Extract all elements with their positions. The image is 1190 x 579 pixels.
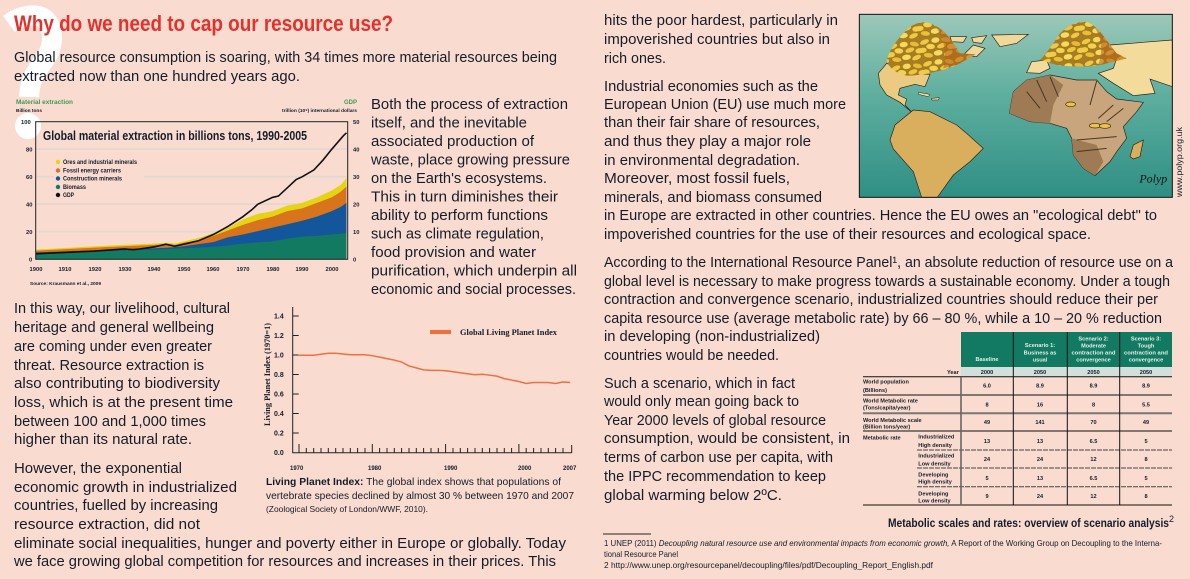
coin pile over north america: [887, 22, 975, 76]
table values: 8: [1144, 494, 1148, 500]
intro text: [14, 49, 557, 85]
text block: extraction pressures: waste, place growing pressure: [370, 152, 570, 168]
table values: 8.9: [1142, 384, 1150, 390]
africa shaded side: [1009, 75, 1103, 176]
stacked area layers: [36, 133, 346, 259]
table caption: 2: [1169, 514, 1174, 524]
text block: ecological debt: Industrial economies such as the: [604, 78, 818, 95]
left and right axis labels: 100: [21, 120, 31, 126]
table values: 70: [1090, 420, 1097, 426]
row labels: [863, 380, 955, 505]
chart title: Global material extraction in billions tons, 1990-2005: [43, 128, 307, 143]
row labels: Developing: [918, 492, 949, 498]
map frame: [859, 14, 1172, 197]
year row: 2000: [981, 370, 993, 376]
chart legend: [56, 160, 138, 199]
footnotes: 2 http://www.unep.org/resourcepanel/decoupling/files/pdf/Decoupling_Report_English.pdf: [604, 561, 934, 570]
row labels: World Metabolic rate: [863, 399, 918, 405]
year axis labels: 1990: [296, 267, 308, 273]
x axis labels: 1980: [368, 466, 382, 472]
text block: ecological debt: minerals, and biomass consumed: [604, 189, 822, 206]
footnotes: [603, 534, 1162, 570]
remaining coins in africa: [1066, 102, 1111, 128]
text block: international resource panel: According to the International Resource Panel¹, an absolute reduction of resource use on a: [604, 254, 1174, 271]
left and right axis labels: 50: [353, 120, 359, 126]
footnotes: tional Resource Panel: [604, 550, 678, 559]
greenland and arctic: [950, 34, 1028, 57]
table values: 8.9: [1090, 384, 1097, 390]
header labels: Scenario 2:: [1078, 336, 1109, 342]
table values: 141: [1035, 420, 1045, 426]
africa mine lines: [1027, 77, 1123, 152]
x axis labels: 2000: [518, 466, 532, 472]
text block: such a scenario: would only mean going back to: [603, 393, 799, 410]
year axis labels: 1900: [30, 267, 42, 273]
y axis labels: 0.4: [274, 411, 284, 418]
south america: [890, 110, 983, 197]
text block: ecological debt: in Europe are extracted in other countries. Hence the EU owes an "ecological debt" to: [604, 207, 1157, 224]
row labels: Developing: [918, 473, 949, 479]
row labels: (Billions): [863, 388, 887, 394]
y axis labels: 1.4: [274, 314, 284, 320]
year axis labels: 1950: [178, 267, 190, 273]
text block: ecological debt: European Union (EU) use much more: [604, 96, 846, 113]
y axis title: Living Planet Index (1970=1): [263, 323, 272, 426]
text block: such a scenario: [603, 375, 850, 504]
chart axis headings: trillion (10⁹) international dollars: [282, 108, 357, 113]
x axis labels: [290, 466, 577, 472]
chart caption: Living Planet Index: The global index shows that populations of: [266, 476, 561, 488]
left and right axis labels: [21, 120, 359, 264]
header labels: usual: [1033, 357, 1048, 363]
chart legend: Biomass: [63, 185, 87, 191]
chart axis headings: [16, 100, 357, 113]
table values: 6.5: [1090, 476, 1097, 482]
table values: 6.0: [983, 384, 991, 390]
row labels: World population: [863, 380, 909, 386]
x axis labels: 1990: [444, 466, 458, 472]
table values: 8: [1092, 402, 1095, 408]
footnotes: 1 UNEP (2011) Decoupling natural resource use and environmental impacts from economic growth, A Report of the Working Group on Decoupling to the Interna-: [604, 539, 1162, 548]
chart legend: GDP: [63, 193, 74, 199]
header labels: contraction and: [1072, 351, 1116, 357]
left and right axis labels: 10: [353, 230, 359, 236]
header labels: Moderate: [1081, 344, 1106, 350]
text block: extraction pressures: such as climate regulation,: [371, 226, 544, 242]
row labels: Industrialized: [918, 435, 955, 441]
row labels: (Billion tons/year): [863, 425, 910, 431]
left and right axis labels: 0: [353, 258, 356, 264]
y axis labels: 1.2: [274, 333, 284, 340]
table values: 12: [1090, 457, 1097, 463]
table values: 24: [984, 457, 991, 463]
left and right axis labels: 40: [26, 202, 32, 208]
intro text: Global resource consumption is soaring, with 34 times more material resources being: [14, 49, 557, 66]
legend backing: [54, 155, 144, 201]
year axis labels: [30, 267, 338, 273]
text block: ecological debt: [604, 78, 1157, 243]
row labels: Industrialized: [918, 454, 955, 460]
text block: extraction pressures: on the Earth's ecosystems.: [371, 170, 547, 187]
row labels: Low density: [918, 461, 952, 467]
row labels: High density: [918, 480, 953, 486]
table values: 13: [984, 439, 990, 445]
text block: international resource panel: in developing (non-industrialized): [604, 328, 820, 345]
text block: exponential growth: countries, fuelled by increasing: [14, 497, 218, 514]
text block: ecological debt: than their fair share of resources,: [604, 114, 820, 131]
header labels: contraction and: [1124, 351, 1169, 357]
text block: exponential growth: economic growth in industrialized: [14, 479, 237, 496]
row labels: Low density: [918, 499, 952, 505]
text block: exponential growth: resource extraction, did not: [14, 516, 201, 533]
text block: livelihood under threat: between 100 and 1,000 times: [14, 413, 206, 430]
header labels: Tough: [1138, 344, 1155, 350]
text block: international resource panel: countries would be needed.: [604, 347, 779, 364]
y axis labels: 0.0: [274, 450, 284, 457]
text block: extraction pressures: [370, 96, 577, 298]
chart caption: (Zoological Society of London/WWF, 2010).: [266, 504, 428, 514]
text block: international resource panel: [604, 254, 1174, 364]
chart axis headings: Billion tons: [16, 108, 42, 113]
text block: extraction pressures: food provision and water: [371, 244, 536, 261]
table values: 8: [985, 402, 989, 408]
year row: Year: [947, 370, 960, 376]
text block: international resource panel: contraction and convergence scenario, industrialized countries should reduce their per: [604, 291, 1158, 308]
text block: exponential growth: we face growing global competition for resources and increases in their prices. This: [13, 553, 556, 570]
text block: livelihood under threat: heritage and general wellbeing: [14, 319, 214, 336]
caribbean islands: [918, 92, 939, 100]
text block: extraction pressures: economic and social processes.: [371, 281, 576, 298]
row labels: (Tons/capita/year): [863, 406, 911, 412]
row labels: High density: [918, 443, 953, 449]
title: Why do we need to cap our resource use?: [14, 11, 393, 36]
text block: extraction pressures: itself, and the inevitable: [371, 114, 527, 132]
text block: livelihood under threat: loss, which is at the present time: [14, 394, 233, 411]
year row: 2050: [1087, 370, 1100, 376]
table values: 5: [1144, 476, 1148, 482]
left and right axis labels: 20: [353, 202, 359, 208]
text block: international resource panel: capita resource use (average metabolic rate) by 66 – 80 %, while a 10 – 20 % reduction: [604, 310, 1162, 327]
text block: extraction pressures: purification, which underpin all: [371, 262, 577, 280]
x axis labels: 2007: [563, 466, 577, 472]
year axis labels: 1960: [207, 267, 219, 273]
table header band: [961, 332, 1172, 367]
table values: 13: [1037, 476, 1043, 482]
table values: 12: [1090, 494, 1097, 500]
chart legend: Construction minerals: [63, 176, 123, 182]
text block: poor hardest: impoverished countries but also in: [604, 31, 830, 48]
table values: 8.9: [1036, 384, 1044, 390]
text block: livelihood under threat: are coming under even greater: [14, 338, 212, 355]
text block: international resource panel: global level is necessary to make progress towards a sustainable economy. Under a tough: [604, 273, 1170, 290]
y axis labels: 1.0: [274, 352, 284, 360]
table values: 6.5: [1090, 439, 1097, 445]
left and right axis labels: 60: [26, 175, 32, 181]
table values: 24: [1037, 494, 1044, 500]
x axis labels: 1970: [290, 466, 304, 472]
text block: ecological debt: Moreover, most fossil fuels,: [604, 170, 790, 187]
legend: Global Living Planet Index: [460, 328, 557, 337]
text block: ecological debt: and thus they play a major role: [604, 133, 811, 150]
y axis labels: 0.6: [274, 392, 284, 398]
table values: 49: [1143, 420, 1149, 426]
row labels: Metabolic rate: [863, 435, 901, 441]
y axis labels: 0.2: [274, 430, 284, 438]
row labels: World Metabolic scale: [863, 418, 922, 424]
grid lines: [36, 149, 347, 232]
year axis labels: 2000: [326, 267, 338, 273]
chart: living planet index: [263, 307, 577, 472]
text block: poor hardest: hits the poor hardest, particularly in: [604, 12, 838, 29]
text block: extraction pressures: ability to perform functions: [371, 207, 548, 224]
text block: such a scenario: global warming below 2ºC.: [604, 487, 782, 504]
table values: [983, 384, 1150, 500]
year axis labels: 1920: [89, 267, 101, 273]
text block: such a scenario: Year 2000 levels of global resource: [604, 412, 826, 429]
left and right axis labels: 20: [26, 230, 32, 236]
north and central america: [878, 63, 930, 112]
year row: [947, 370, 1152, 376]
text block: livelihood under threat: [14, 300, 233, 448]
axes and ticks: [293, 307, 572, 453]
table values: 5: [1144, 439, 1148, 445]
header labels: convergence: [1076, 358, 1111, 364]
coin pile over europe: [1040, 22, 1127, 67]
credit url: www.polyp.org.uk: [1175, 126, 1184, 198]
table values: 5: [985, 476, 989, 482]
text block: exponential growth: [13, 460, 566, 570]
text block: livelihood under threat: threat. Resource extraction is: [14, 357, 204, 374]
year axis labels: 1980: [267, 267, 279, 273]
chart axis headings: Material extraction: [16, 100, 73, 106]
header labels: Scenario 1:: [1025, 343, 1055, 349]
year axis labels: 1910: [59, 267, 71, 273]
text block: poor hardest: rich ones.: [604, 50, 666, 67]
text block: extraction pressures: associated production of: [371, 133, 535, 150]
chart caption: vertebrate species declined by almost 30 % between 1970 and 2007: [266, 490, 574, 502]
chart legend: Ores and industrial minerals: [63, 160, 138, 166]
text block: extraction pressures: This in turn diminishes their: [371, 188, 558, 206]
chart caption: [266, 476, 574, 514]
table values: 49: [984, 420, 990, 426]
text block: exponential growth: However, the exponential: [14, 460, 182, 477]
header labels: convergence: [1129, 358, 1163, 364]
table values: 9: [985, 494, 989, 500]
text block: livelihood under threat: In this way, our livelihood, cultural: [14, 300, 230, 317]
text block: such a scenario: Such a scenario, which in fact: [604, 375, 796, 392]
text block: such a scenario: terms of carbon use per capita, with: [604, 449, 833, 466]
decorative white question mark: [9, 15, 52, 139]
artist signature: Polyp: [1138, 172, 1167, 186]
ocean: [859, 14, 1172, 197]
index line: [299, 353, 570, 383]
left and right axis labels: 0: [29, 258, 32, 264]
year axis labels: 1930: [119, 267, 131, 273]
chart axis headings: GDP: [344, 100, 357, 106]
text block: extraction pressures: Both the process of extraction: [371, 96, 568, 113]
text block: such a scenario: consumption, would be consistent, in: [604, 430, 850, 447]
year axis labels: 1970: [237, 267, 249, 273]
africa: [1009, 75, 1143, 176]
y axis labels: 0.8: [274, 372, 284, 379]
header labels: Baseline: [975, 357, 999, 363]
text block: exponential growth: eliminate social inequalities, hunger and poverty either in Europe or globally. Today: [14, 535, 566, 552]
text block: livelihood under threat: also contributing to biodiversity: [14, 375, 221, 392]
text block: ecological debt: in environmental degradation.: [604, 152, 800, 169]
table: metabolic scales and rates: [863, 332, 1172, 505]
table values: 5.5: [1142, 402, 1150, 408]
year row: 2050: [1034, 370, 1046, 376]
text block: ecological debt: impoverished countries for the use of their resources and ecological space.: [604, 226, 1091, 243]
table lines: [863, 332, 1172, 505]
y axis labels: [274, 314, 284, 457]
header labels: Business as: [1024, 350, 1056, 356]
header labels: [975, 336, 1169, 364]
table values: 8: [1144, 457, 1148, 463]
europe and asia: [1027, 40, 1172, 96]
chart source: Source: Krausmann et al., 2009: [30, 281, 101, 287]
intro text: extracted now than one hundred years ago.: [14, 68, 300, 85]
madagascar: [1130, 140, 1143, 159]
table values: 24: [1037, 457, 1044, 463]
chart legend: Fossil energy carriers: [63, 168, 122, 174]
year row: 2050: [1140, 370, 1152, 376]
plot frame: [36, 122, 348, 259]
year row band: [961, 367, 1172, 376]
left and right axis labels: 30: [353, 175, 359, 181]
text block: livelihood under threat: higher than its natural rate.: [14, 431, 192, 448]
text block: poor hardest: [604, 12, 838, 67]
header labels: Scenario 3:: [1131, 336, 1161, 342]
table values: 16: [1037, 402, 1043, 408]
left and right axis labels: 40: [353, 148, 359, 154]
illustration: world map with coin piles: [859, 14, 1184, 198]
left and right axis labels: 80: [26, 148, 32, 154]
year axis labels: 1940: [148, 267, 160, 273]
table values: 13: [1037, 439, 1043, 445]
text block: such a scenario: the IPPC recommendation to keep: [604, 468, 826, 485]
chart: global material extraction: [16, 100, 359, 287]
